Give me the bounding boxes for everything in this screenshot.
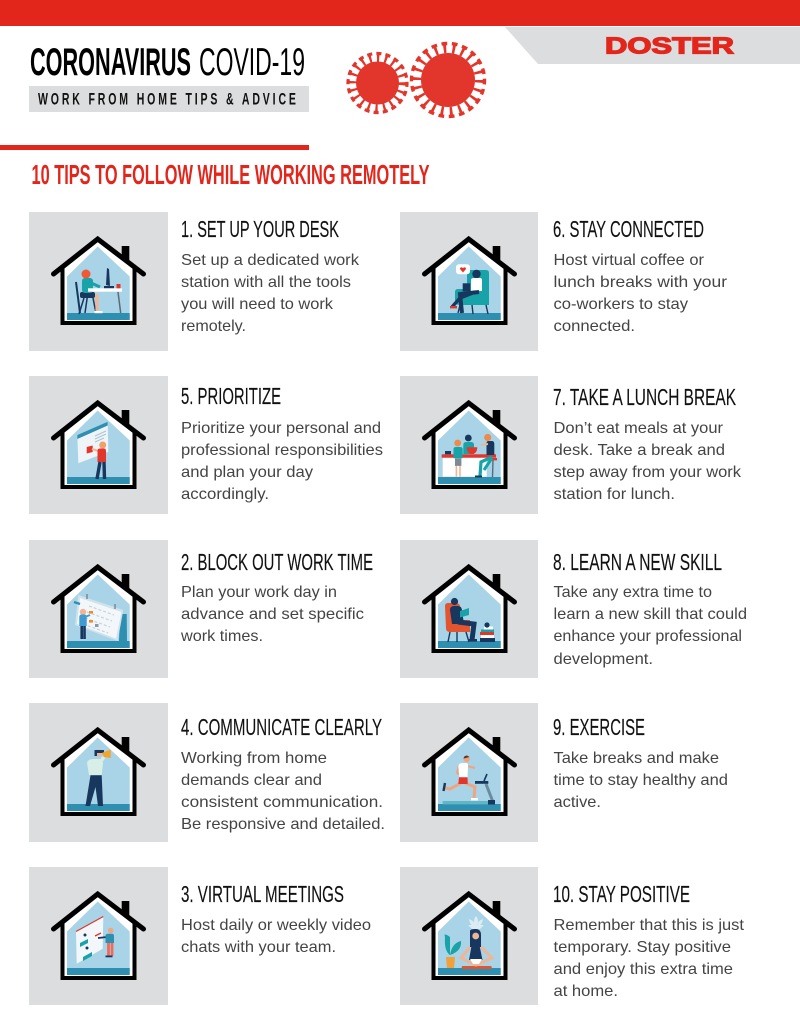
text: tip 7: station for lunch.	[554, 486, 675, 503]
text: tip 7: Don’t eat meals at your	[554, 420, 724, 437]
text: tip 6: lunch breaks with your	[554, 274, 728, 291]
text: tip 9	[554, 750, 728, 811]
icon: person with megaphone	[54, 729, 144, 814]
text: tip 1	[181, 252, 360, 335]
text: tip 5	[181, 420, 383, 503]
text: tip 6	[554, 252, 728, 335]
text: tip 8: Take any extra time to	[554, 584, 712, 601]
icon: person at large calendar	[54, 566, 144, 651]
text: tip 10: temporary. Stay positive	[554, 939, 731, 956]
text: tip 5: Prioritize your personal and	[181, 420, 381, 437]
text: tip 3: chats with your team.	[181, 939, 336, 956]
text: tip 10	[554, 917, 745, 1000]
text: tip 3: Host daily or weekly video	[181, 917, 371, 934]
text: tip 3	[181, 917, 371, 956]
icon: person at video chat board	[54, 893, 144, 978]
text: tip 10: at home.	[554, 983, 618, 1000]
red divider rule	[0, 145, 309, 150]
heading: tip 4: 4. COMMUNICATE CLEARLY	[181, 714, 382, 740]
text: tip 8	[554, 584, 747, 668]
text: tip 8: learn a new skill that could	[554, 606, 747, 623]
text: tip 5: accordingly.	[181, 486, 269, 503]
text: tip 1: Set up a dedicated work	[181, 252, 360, 269]
logo tab	[505, 27, 800, 64]
heading: tip 8: 8. LEARN A NEW SKILL	[553, 549, 722, 575]
text: tip 8: development.	[554, 651, 653, 668]
panel: tip 10 stay positive	[400, 867, 745, 1005]
text: tip 4: Be responsive and detailed.	[181, 816, 385, 833]
text: tip 1: station with all the tools	[181, 274, 351, 291]
text: tip 6: co-workers to stay	[554, 296, 688, 313]
icon: person at desk in house	[54, 238, 144, 323]
text: tip 10: and enjoy this extra time	[554, 961, 733, 978]
top red banner	[0, 0, 800, 26]
heading: tip 3: 3. VIRTUAL MEETINGS	[181, 881, 344, 907]
panel: tip 1 set up your desk	[29, 212, 360, 351]
icon: person reading in armchair with books	[424, 566, 514, 651]
text: tip 2: Plan your work day in	[181, 584, 337, 601]
text: tip 7: desk. Take a break and	[554, 442, 725, 459]
text: tip 6: Host virtual coffee or	[554, 252, 705, 269]
text: tip 4: demands clear and	[181, 772, 322, 789]
panel: tip 4 communicate clearly	[29, 703, 385, 842]
text: tip 2	[180, 584, 364, 645]
text: tip 1: you will need to work	[181, 296, 334, 313]
heading: tip 10: 10. STAY POSITIVE	[553, 881, 690, 907]
heading: tip 5: 5. PRIORITIZE	[181, 383, 281, 409]
icon: coronavirus particles	[348, 44, 484, 116]
panel: tip 3 virtual meetings	[29, 867, 371, 1005]
heading: tip 9: 9. EXERCISE	[553, 714, 645, 740]
section heading: 10 TIPS TO FOLLOW WHILE WORKING REMOTELY	[32, 159, 430, 190]
title: COVID-19	[199, 41, 305, 84]
text: tip 5: and plan your day	[181, 464, 313, 481]
heading: tip 2: 2. BLOCK OUT WORK TIME	[181, 549, 373, 575]
panel: tip 2 block out work time	[29, 540, 373, 678]
text: tip 2: work times.	[180, 628, 263, 645]
panel: tip 6 stay connected	[400, 212, 728, 351]
panel: tip 5 prioritize	[29, 376, 383, 514]
text: tip 2: advance and set specific	[181, 606, 364, 623]
text: tip 7: step away from your work	[554, 464, 742, 481]
heading: tip 6: 6. STAY CONNECTED	[553, 216, 704, 242]
panel: tip 7 take a lunch break	[400, 376, 742, 514]
icon: person at priority board	[54, 402, 144, 487]
text: tip 9: time to stay healthy and	[554, 772, 728, 789]
panel: tip 9 exercise	[400, 703, 728, 842]
text: tip 9: active.	[554, 794, 601, 811]
text: tip 4	[181, 750, 385, 833]
text: tip 8: enhance your professional	[554, 628, 742, 645]
text: tip 1: remotely.	[181, 318, 246, 335]
panel: tip 8 learn a new skill	[400, 540, 747, 678]
title: CORONAVIRUS	[30, 41, 191, 84]
icon: person in armchair with laptop	[424, 238, 514, 323]
subtitle bar	[29, 86, 309, 112]
text: tip 4: Working from home	[181, 750, 327, 767]
icon: runner on treadmill	[424, 729, 514, 814]
text: tip 10: Remember that this is just	[554, 917, 745, 934]
text: tip 5: professional responsibilities	[181, 442, 383, 459]
text: tip 4: consistent communication.	[181, 794, 383, 811]
text: tip 7	[554, 420, 742, 503]
logo: DOSTER: DOSTER	[605, 32, 734, 58]
text: tip 9: Take breaks and make	[554, 750, 719, 767]
subtitle bar: WORK FROM HOME TIPS & ADVICE	[38, 89, 296, 108]
text: tip 6: connected.	[554, 318, 635, 335]
heading: tip 1: 1. SET UP YOUR DESK	[181, 216, 339, 242]
icon: person meditating beside plant	[424, 893, 514, 978]
icon: family at kitchen counter	[424, 402, 514, 487]
